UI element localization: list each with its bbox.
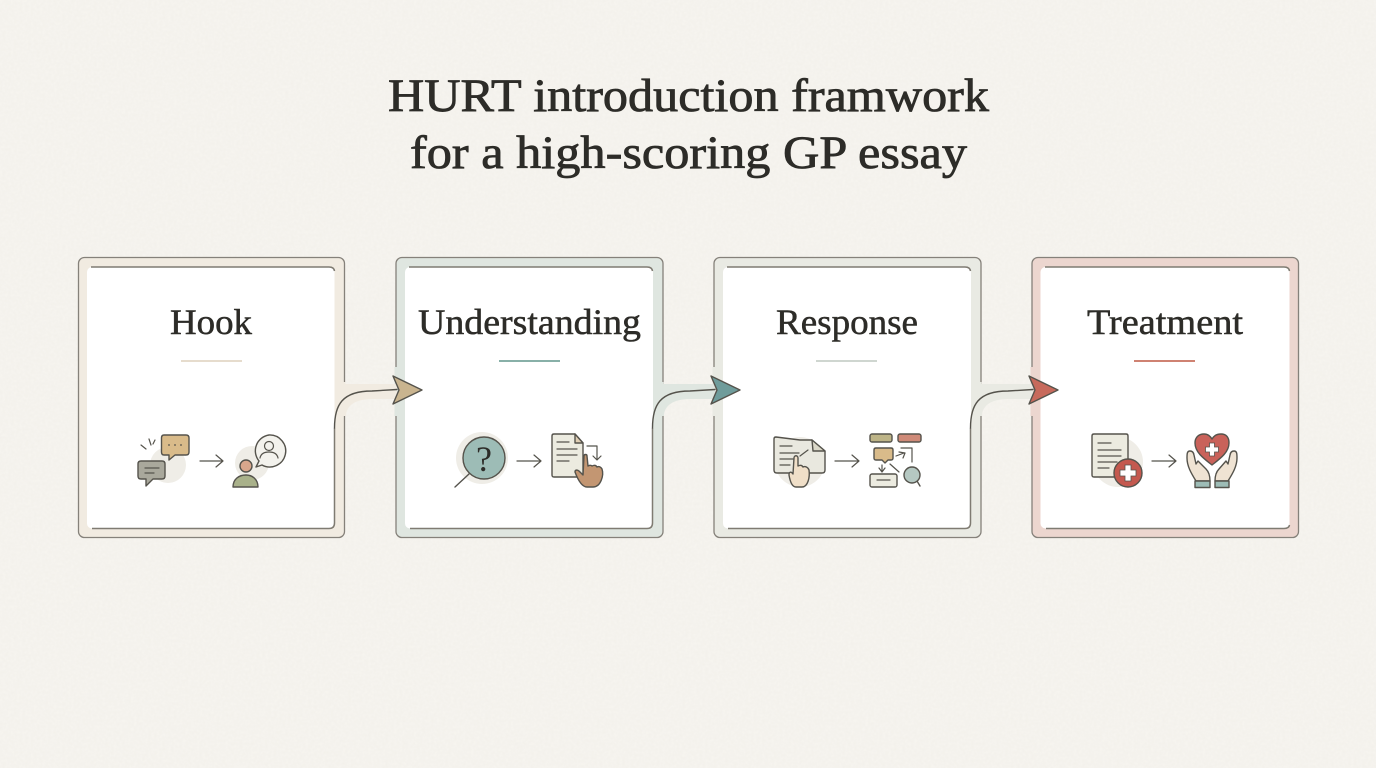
icon: question magnifier to document and hand: ? — [476, 439, 492, 479]
heading: Treatment: Treatment — [1087, 302, 1243, 342]
panel: Understanding — [396, 258, 663, 538]
panel: Hook — [78, 258, 344, 538]
title — [388, 70, 990, 179]
heading: Response: Response — [776, 302, 918, 342]
icon: document and hand to flow diagram — [774, 434, 921, 487]
arrow: Understanding to Response — [652, 367, 740, 428]
heading: Hook: Hook — [170, 302, 252, 342]
arrow: Hook to Understanding — [334, 367, 422, 428]
icon: question magnifier to document and hand — [455, 432, 603, 487]
icon: speech bubbles to person — [138, 435, 286, 487]
title: HURT introduction framwork — [388, 70, 990, 122]
underline: Understanding — [499, 360, 560, 362]
icon: medical document to caring hands — [1092, 434, 1237, 488]
underline: Response — [816, 360, 877, 362]
heading: Understanding: Understanding — [418, 302, 641, 342]
underline: Hook — [181, 360, 242, 362]
underline: Treatment — [1134, 360, 1195, 362]
panel: Treatment — [1032, 258, 1298, 538]
title: for a high-scoring GP essay — [410, 127, 968, 179]
arrow: Response to Treatment — [970, 367, 1058, 428]
panel: Response — [714, 258, 981, 538]
